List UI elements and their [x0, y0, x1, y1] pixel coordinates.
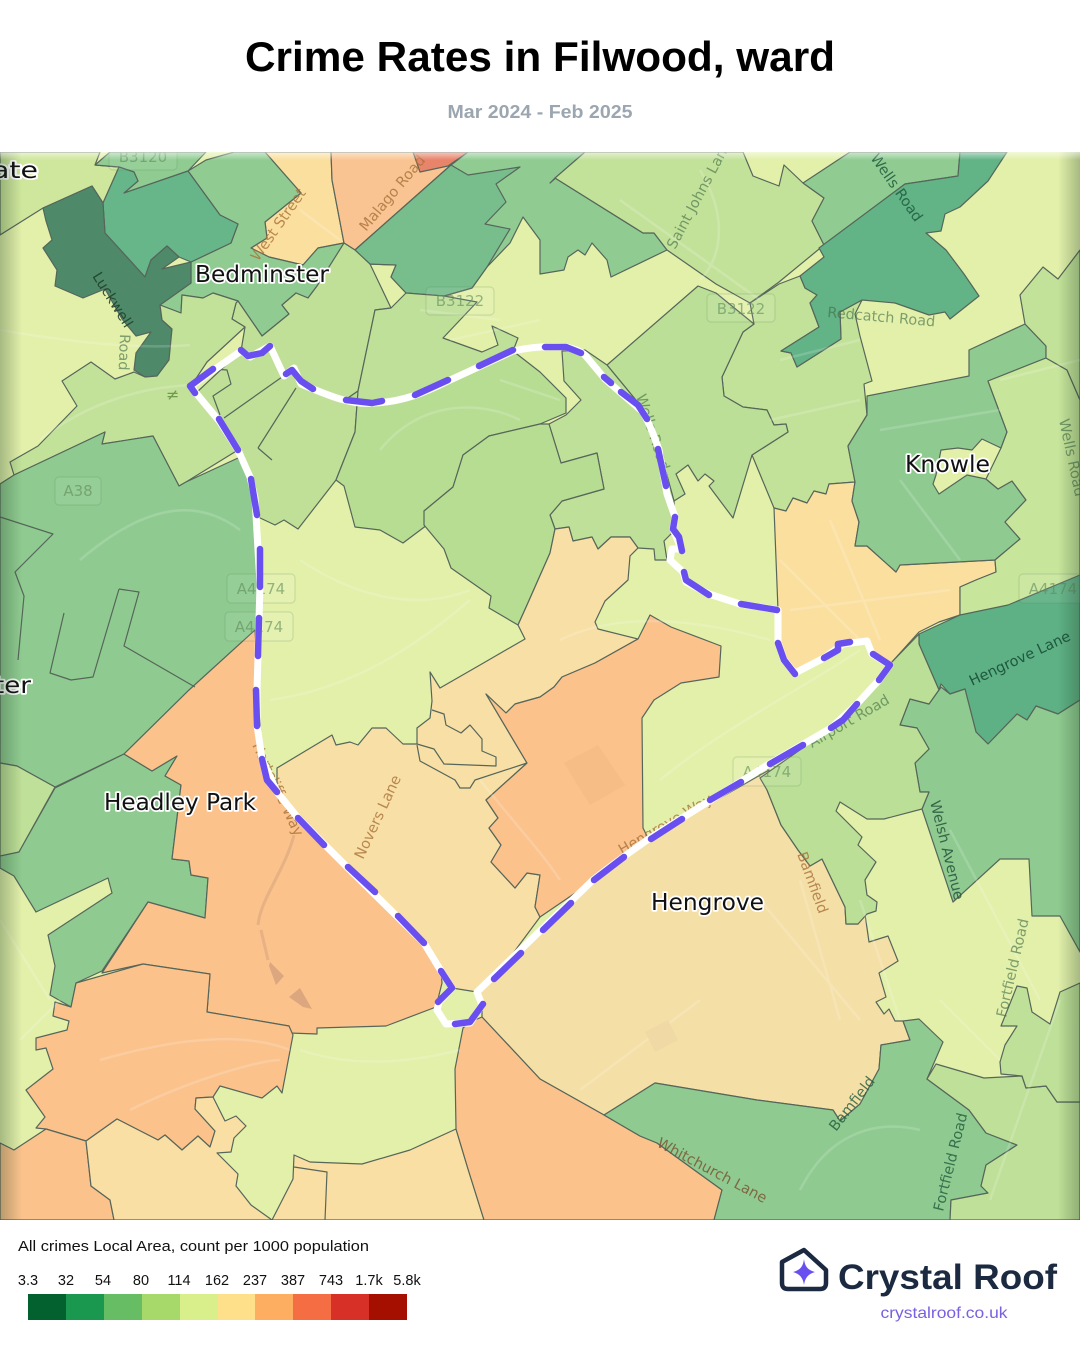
- road shields: A4174: [235, 618, 283, 636]
- road shields: B3120: [119, 148, 167, 166]
- map detail patches: [258, 745, 678, 1052]
- street labels: Wells Road: [867, 151, 925, 225]
- street labels: Road: [115, 334, 132, 371]
- legend scale values: 1.7k: [355, 1273, 383, 1289]
- street labels: Welsh Avenue: [926, 799, 966, 902]
- subtitle: date range: Mar 2024 - Feb 2025: [448, 102, 632, 122]
- street labels: Hartcliffe Way: [248, 740, 306, 839]
- road network texture: [0, 170, 1080, 1200]
- place labels: Bedminster: [195, 262, 330, 288]
- street labels: Redcatch Road: [827, 305, 936, 330]
- map regions: [0, 152, 1080, 1220]
- legend scale values: 114: [167, 1273, 191, 1289]
- road shields: [55, 145, 1080, 786]
- street labels: Malago Road: [357, 153, 429, 235]
- website: crystalroof.co.uk: [880, 1305, 1009, 1322]
- street labels: Luckwell: [89, 270, 135, 331]
- legend: [18, 1239, 421, 1320]
- street labels: Fortfield Road: [931, 1111, 971, 1213]
- logo: Crystal Roof: [782, 1250, 1057, 1322]
- ward boundary: purple dashes: [190, 346, 890, 1024]
- street labels: Airport Road: [806, 692, 892, 751]
- map edge vignette: [0, 152, 1080, 1220]
- legend scale values: 237: [243, 1273, 267, 1289]
- legend scale values: 80: [133, 1273, 149, 1289]
- legend scale values: 162: [205, 1273, 229, 1289]
- road shields: B3122: [717, 300, 765, 318]
- street labels: Bamfield: [827, 1074, 879, 1134]
- title: Crime Rates in Filwood, ward: [245, 33, 835, 80]
- legend scale values: 54: [95, 1273, 111, 1289]
- place labels: Hengrove: [651, 890, 764, 916]
- street labels: Wells Road: [632, 392, 672, 472]
- street labels: Fortfield Road: [994, 917, 1033, 1019]
- wordmark: Crystal Roof: [838, 1258, 1057, 1297]
- legend scale values: 387: [281, 1273, 305, 1289]
- road shields: A38: [63, 482, 93, 500]
- legend colour ramp: [28, 1294, 407, 1320]
- legend scale values: 743: [319, 1273, 343, 1289]
- legend scale values: [18, 1273, 421, 1289]
- ward boundary: white route: [191, 346, 890, 1024]
- street labels: Saint Johns Lane: [664, 138, 735, 252]
- street labels: Bamfield: [793, 850, 830, 916]
- place labels: Knowle: [905, 452, 990, 478]
- street labels: Whitchurch Lane: [654, 1135, 769, 1207]
- road shields: A4174: [237, 580, 285, 598]
- street labels: Novers Lane: [352, 773, 405, 862]
- legend scale values: 32: [58, 1273, 74, 1289]
- street labels: [89, 138, 1080, 1213]
- street labels: Hengrove Way: [616, 792, 716, 858]
- icon: railway station: ≠: [166, 385, 179, 404]
- road shields: A4174: [743, 763, 791, 781]
- road shields: B3122: [436, 292, 484, 310]
- road shields: A4174: [1029, 580, 1077, 598]
- legend title: All crimes Local Area, count per 1000 population: [18, 1239, 369, 1255]
- legend scale values: 3.3: [18, 1273, 38, 1289]
- place labels: Headley Park: [104, 790, 257, 816]
- icon: house with star: [782, 1250, 826, 1289]
- place labels: [0, 158, 990, 916]
- legend scale values: 5.8k: [393, 1273, 421, 1289]
- street labels: West Street: [248, 186, 310, 264]
- street labels: Hengrove Lane: [967, 629, 1073, 690]
